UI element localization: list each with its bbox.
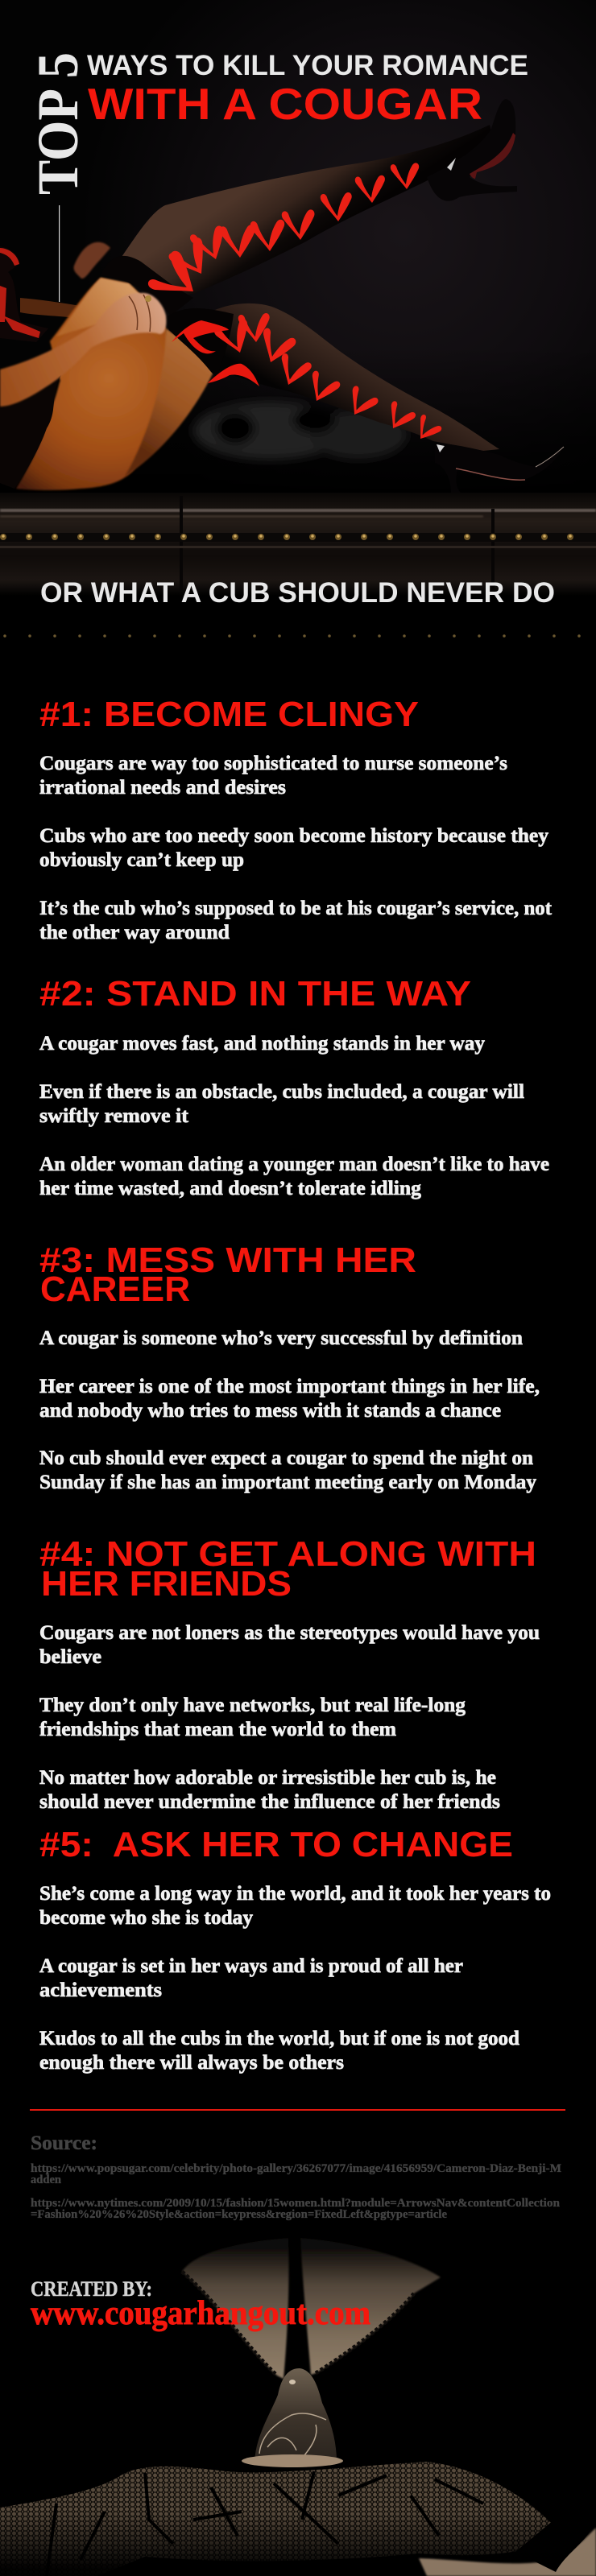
second thigh behind bbox=[125, 328, 214, 477]
section 3 body text: Sunday if she has an important meeting early on Monday bbox=[39, 1472, 536, 1493]
section 3 body text: No cub should ever expect a cougar to spend the night on bbox=[39, 1447, 533, 1469]
section 1 body text: irrational needs and desires bbox=[39, 777, 286, 799]
darkening above bench bbox=[0, 346, 596, 499]
red heart seam on upper leg bbox=[145, 163, 419, 311]
heading 4: HER FRIENDS bbox=[41, 1564, 292, 1604]
section 5 body text: She’s come a long way in the world, and it took her years to bbox=[39, 1883, 551, 1905]
lower leg in sheer stocking bbox=[201, 303, 499, 451]
section 4 body text: friendships that mean the world to them bbox=[39, 1719, 396, 1740]
heading 3: #3: MESS WITH HER bbox=[39, 1241, 416, 1280]
stocking top band bbox=[101, 256, 193, 316]
heading 1: #1: BECOME CLINGY bbox=[39, 695, 419, 734]
thigh top highlight between the hands bbox=[56, 278, 153, 336]
red garter bows bbox=[172, 320, 259, 386]
section 3 body text: and nobody who tries to mess with it stands a chance bbox=[39, 1400, 501, 1422]
lower leg patent heel bbox=[435, 443, 564, 493]
red divider bbox=[30, 2109, 565, 2111]
source urls: =Fashion%20%26%20Style&action=keypress&region=FixedLeft&pgtype=article bbox=[31, 2208, 447, 2221]
title line one: WAYS TO KILL YOUR ROMANCE bbox=[87, 50, 528, 81]
hero photo: woman on leather bench bbox=[0, 0, 596, 644]
heading 3 bbox=[39, 1241, 416, 1309]
section 5 body text: achievements bbox=[39, 1979, 162, 2001]
black lace underwear bbox=[0, 375, 61, 489]
source heading: Source: bbox=[31, 2132, 97, 2154]
heading 3: CAREER bbox=[40, 1269, 190, 1309]
sources bbox=[31, 2132, 561, 2221]
section 4 body text: believe bbox=[39, 1646, 101, 1668]
lower stocking black top bbox=[165, 308, 234, 378]
section 2 body text: A cougar moves fast, and nothing stands in her way bbox=[39, 1033, 486, 1055]
lower forearm and hand on thigh bbox=[0, 293, 166, 407]
heading 4 bbox=[39, 1534, 536, 1604]
stud row under tagline bbox=[5, 634, 596, 638]
woman's upper arm and costume bbox=[0, 246, 81, 342]
black fold over skin bbox=[515, 2512, 592, 2572]
lace edges bbox=[182, 2272, 414, 2376]
section 3 body text: A cougar is someone who’s very successful by definition bbox=[39, 1327, 523, 1349]
section 1 body text bbox=[39, 753, 553, 943]
section 3 body text: Her career is one of the most important things in her life, bbox=[39, 1376, 540, 1397]
heading 4: #4: NOT GET ALONG WITH bbox=[39, 1534, 536, 1574]
leather bench back tufting bbox=[193, 402, 407, 460]
leather bench rail with stud row bbox=[0, 493, 596, 596]
section 5 body text: A cougar is set in her ways and is proud of all her bbox=[39, 1955, 463, 1977]
section 3 body text bbox=[39, 1327, 540, 1493]
section 5: ask her to change bbox=[39, 1825, 551, 2074]
section 1 body text: obviously can’t keep up bbox=[39, 849, 244, 871]
fade to black at hero bottom bbox=[0, 592, 596, 644]
section 5 body text: Kudos to all the cubs in the world, but if one is not good bbox=[39, 2028, 519, 2050]
title bbox=[26, 50, 528, 195]
section 1 body text: It’s the cub who’s supposed to be at his cougar’s service, not bbox=[39, 898, 553, 919]
rings on fingers bbox=[145, 295, 151, 302]
vertical TOP 5 label: TOP 5 bbox=[26, 52, 90, 195]
footer photo bbox=[0, 2238, 596, 2576]
source urls: https://www.nytimes.com/2009/10/15/fashion/15women.html?module=ArrowsNav&contentCollection bbox=[31, 2197, 561, 2210]
skin shapes bbox=[182, 2238, 441, 2379]
source urls: adden bbox=[31, 2174, 62, 2186]
section 1 body text: Cubs who are too needy soon become history because they bbox=[39, 825, 549, 847]
heading 5: #5: ASK HER TO CHANGE bbox=[39, 1825, 513, 1864]
skin at bottom right bbox=[419, 2528, 596, 2576]
section 1: become clingy bbox=[39, 695, 553, 943]
section 4 body text: They don’t only have networks, but real life-long bbox=[39, 1695, 466, 1716]
created by label: CREATED BY: bbox=[31, 2277, 152, 2301]
section 4 body text: should never undermine the influence of her friends bbox=[39, 1791, 500, 1813]
condom dome bbox=[242, 2368, 343, 2467]
heading 2: #2: STAND IN THE WAY bbox=[39, 974, 471, 1013]
section 2 body text: her time wasted, and doesn’t tolerate idling bbox=[39, 1178, 422, 1199]
section 4 body text: No matter how adorable or irresistible her cub is, he bbox=[39, 1767, 496, 1789]
main hip and thigh in skin tone bbox=[16, 278, 168, 490]
section 4 body text: Cougars are not loners as the stereotypes would have you bbox=[39, 1622, 540, 1644]
source urls: https://www.popsugar.com/celebrity/photo-gallery/36267077/image/41656959/Cameron-Diaz-Benji-M bbox=[31, 2162, 561, 2175]
creator credit bbox=[31, 2277, 370, 2332]
upper hand on stocking bbox=[74, 242, 110, 279]
vertical rule below TOP 5 bbox=[59, 205, 60, 302]
source urls bbox=[31, 2162, 561, 2221]
section 5 body text: become who she is today bbox=[39, 1907, 254, 1929]
section 3: mess with her career bbox=[39, 1241, 540, 1493]
raised leg patent heel bbox=[427, 99, 517, 201]
red heart seam on lower leg bbox=[213, 313, 443, 445]
section 2: stand in the way bbox=[39, 974, 549, 1199]
fingers shading bbox=[129, 295, 151, 332]
section 2 body text: swiftly remove it bbox=[39, 1105, 189, 1127]
upper raised leg in sheer stocking bbox=[113, 125, 493, 295]
section 2 body text bbox=[39, 1033, 549, 1199]
wall backdrop bbox=[0, 0, 596, 644]
section 1 body text: the other way around bbox=[39, 922, 230, 943]
website url: www.cougarhangout.com bbox=[31, 2295, 370, 2332]
section 2 body text: Even if there is an obstacle, cubs included, a cougar will bbox=[39, 1081, 524, 1103]
section 5 body text bbox=[39, 1883, 551, 2074]
fishnet stockings bbox=[0, 2462, 596, 2576]
section 2 body text: An older woman dating a younger man doesn’t like to have bbox=[39, 1154, 549, 1175]
title line two: WITH A COUGAR bbox=[88, 79, 482, 129]
subtitle: OR WHAT A CUB SHOULD NEVER DO bbox=[40, 577, 555, 609]
section 4 body text bbox=[39, 1622, 540, 1813]
section 4: not get along with her friends bbox=[39, 1534, 540, 1813]
section 5 body text: enough there will always be others bbox=[39, 2052, 344, 2074]
section 1 body text: Cougars are way too sophisticated to nurse someone’s bbox=[39, 753, 507, 774]
